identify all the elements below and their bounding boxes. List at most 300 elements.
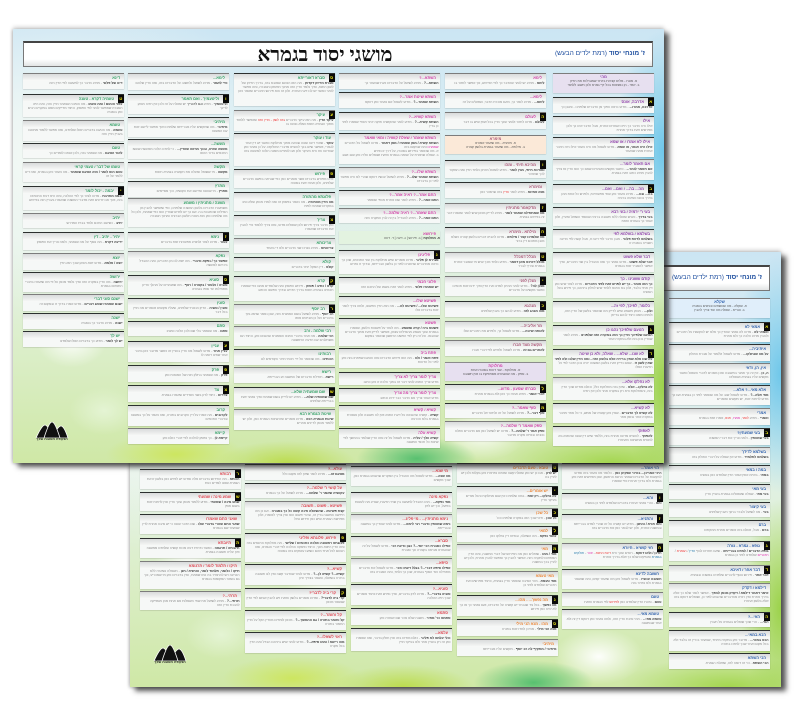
card:: לימא - מדוע יש לומר שהדבר כך לפי הפירוש, אך אפשר לחזור בו xyxy=(454,81,544,85)
card: yesh: ט xyxy=(553,465,556,470)
card: shma: שמע מינה / שמעתי - מדוע ללמוד מכאן שכך הדין ואין לדחות זאת בשום אופן xyxy=(147,500,240,508)
card: lefi: מאי xyxy=(541,546,548,551)
card: xyxy=(553,274,654,298)
card: stam: סתמא xyxy=(437,610,448,615)
column: front sheet red 3 xyxy=(140,469,242,611)
card: mina: מיתיבי xyxy=(543,641,554,646)
card: bet: ב xyxy=(765,430,768,435)
card:: ח xyxy=(541,229,544,234)
card: xyxy=(128,321,229,336)
card:: עוקר - שזוהי דעה שונה שבאה מתוך מחלוקת כאשר יש דין אחר לגמרי, ואפשר שיש בכך להוציא מדברי החולקים. על כן נאמר כאן שהדעה הזו היא העיקר ולכן אנו לומדים ממנה הלכה למעשה בזה xyxy=(244,141,334,153)
card:: נימא xyxy=(211,234,219,239)
card:: סתם xyxy=(217,323,225,328)
card:: אילו xyxy=(643,118,650,123)
card: xyxy=(553,137,654,157)
card: xyxy=(128,181,229,197)
card: xyxy=(553,349,654,374)
card:: לא שנו... שלא... - שאלה, ולא כן שיטה xyxy=(579,351,644,356)
card: hi: היכי אמרינן... בהיכי עסקינן כאן - כלומר מה נאמר בזה ומדוע להקשות על הדברים שאמר התנא הראשון, שכן מפרשים זאת כאן בגמרא ולא בדרך אחרת כפי שאמרו xyxy=(572,471,662,483)
card:: מהיכא תיתי - ומהו xyxy=(504,162,536,167)
card: xyxy=(234,367,335,383)
card: ein xyxy=(669,363,770,383)
card: lo: כ xyxy=(554,510,556,515)
card: sevara xyxy=(351,536,452,556)
box: peach note: א. מימרא - מה שאמר אמורא xyxy=(475,141,516,145)
card: gimel xyxy=(669,541,770,561)
card:: לעולם xyxy=(525,114,536,119)
box: purple note xyxy=(445,362,546,381)
card:: מנלן לפני xyxy=(520,278,536,283)
card:: בשלמא לדעת פלוני - מובן הדבר לפי דעה זו, אבל קשה לפי הדעה השנייה בסוגיה זו xyxy=(560,237,652,245)
card: stam xyxy=(351,608,452,625)
card: nafka xyxy=(351,492,452,512)
column: front sheet red 1 xyxy=(350,466,452,652)
card:: פשיטא שלו... / פשיטא לה... - מה הוא הדין הפשוט, ולמה צריך לומר זאת בדברים אלו xyxy=(342,304,438,312)
card: xyxy=(339,250,440,274)
card: mai xyxy=(457,571,558,592)
card: ein: אין, הן, ודאי xyxy=(746,365,766,370)
card:: פשיטא שלו... xyxy=(413,298,436,303)
card: lo: כל שכן - ודאי שכך הוא במקרה שלפנינו וכו' xyxy=(496,516,556,520)
card: kasha: קרי ביה לדברי? xyxy=(309,590,336,595)
card:: לאחרים גם זה - מדוע לשאול ולפרש לפי דברי חברו xyxy=(472,348,544,352)
card: bameh xyxy=(669,465,770,482)
card:: התם אמר...? ראיה אמר...? xyxy=(389,192,436,197)
card:: לאור הטעם - מה שנאמר בזה, ולכן אנחנו לומדים כך xyxy=(49,151,122,155)
card: amar: אמאי לא xyxy=(745,324,760,329)
card: beram: ברם xyxy=(759,522,766,527)
card: ki: לא נחלקו... רק זאת - במה שלמדנו אין שום מחלוקת והכל מודים בעיקר הדין xyxy=(466,494,556,502)
card: xyxy=(445,301,546,317)
card:: צד xyxy=(214,387,219,392)
card:: ידיעה דקרא - מה נוסף על מה שנאמר, ולמה צריך את הפסוק xyxy=(37,240,122,244)
card:: הטעם שלפיכך נהגו כן xyxy=(606,327,644,332)
card: xyxy=(23,73,124,89)
card: hachi: הכי השתא xyxy=(748,655,766,660)
card:: סוגיא / כלומר / בקצרה / רצף - מה שאומרים על מהלך הדיון מתחילתו עד סופו בגמרא xyxy=(142,283,228,291)
card:: מדוע אומר צריך אם הדבר כבר ידוע וכתוב xyxy=(380,396,438,400)
title bar: front sheet xyxy=(140,265,770,291)
card:: מר אליביה... xyxy=(520,323,542,328)
column: front sheet orange xyxy=(456,463,558,657)
card:: לא שנו אלא שאין ברירה אלא בלשון הזה - ומה הדין שלנו ולא לפני שאין לשון זו - שאם נדייק זאת בלשון המשנה יהיה נכון הדבר לפי כל הדעות האלו xyxy=(555,357,652,369)
card: dalet xyxy=(669,565,770,581)
card:: לימא... xyxy=(213,75,225,80)
card:: עניין אחר - מדוע לשאול מה הדין בעניין זה כאשר מדובר כאן בדבר אחר שאינו דומה לו xyxy=(135,349,228,357)
card:: יש לך לומר - מדוע כך בדברים האלו שלמדנו xyxy=(60,339,122,343)
card:: א xyxy=(649,99,652,104)
card:: ב xyxy=(649,186,652,191)
card: bar: בעי מאי - שאלה ששואלים בגמרא בעניין הדין xyxy=(705,492,768,496)
card:: פליגינן xyxy=(418,252,430,257)
card: amar rav xyxy=(245,464,346,480)
card: resha: ראוי לשאלו...? xyxy=(317,634,342,639)
card:: ה xyxy=(541,114,544,119)
card:: סוגין / סוגיה - הדיון הנוכחי שלפנינו, שעליו מקשים ואומרים מה הדין בכל דבר xyxy=(133,306,228,314)
card:: צריכותא - מדוע נצרכו שני הדברים ולא די באחד xyxy=(266,246,334,250)
card:: פ xyxy=(330,171,333,176)
card: xyxy=(339,296,440,315)
definition box: gemara: א. מונח - מלים קצרות ביותר שמובילות את הדיון xyxy=(570,79,637,83)
card: tana: טעם xyxy=(651,594,659,599)
card: taama: טעמא מאי... xyxy=(637,611,659,616)
card: xyxy=(445,340,546,356)
card: xyxy=(128,341,229,362)
card: zil xyxy=(562,543,663,566)
card: shma: שמע מינה / שמעתי xyxy=(198,494,231,499)
card: nafka: מאי נפקא... - מהו ההבדל למעשה בין שתי הדעות, שנדע מה לעשות בפועל, וכך יש לדון xyxy=(355,500,450,508)
definition box: shakla: שקלא xyxy=(714,299,725,304)
subtitle: ז' מונחי יסוד (רמת ילדים הבעש) xyxy=(555,50,645,57)
card: sevara: סברא... xyxy=(435,538,448,543)
card: xyxy=(445,421,546,441)
card: pesha: קצת פשיטא - שהשאלה אינה קשה כל כך בסברה - אם כן מה חידשה המשנה בדין זה, שהרי פשוט הוא ואין צריך לאומרו, ולכן מפרשת הגמרא שיש כאן חידוש גדול xyxy=(255,509,344,521)
card: al xyxy=(245,483,346,498)
card: xyxy=(234,133,335,166)
card: xyxy=(339,208,440,223)
card:: יש שאמרו פלוני - מדוע לומר זאת בשמו של החכם הזה xyxy=(361,285,438,289)
card:: טעם הוא לומר / הוא הטעם שנאמר - מה נאמר כאן בגמרא, ומה דינו ללמד על זה xyxy=(25,170,122,178)
panel: back sheet xyxy=(13,29,664,463)
card:: סברא דאורייתא xyxy=(298,75,325,80)
card:: קשיא עלה xyxy=(418,430,436,435)
card: xyxy=(23,213,124,228)
card:: ר xyxy=(330,306,333,311)
card: xyxy=(234,257,335,271)
card:: צריכותא xyxy=(317,240,331,245)
card: xyxy=(445,112,546,129)
card:: השתא שיטת אמר...? xyxy=(400,94,436,99)
card:: מכלל דמכלל xyxy=(514,254,536,259)
card: lema: למאי xyxy=(539,528,548,533)
card: vehatanya: והא תניא / והתנן - מדוע יש קושיה על זה שהרי למדנו בברייתא ובמשנה אחרת, ולכן יש לבאר כאן את הדברים בזה xyxy=(574,522,662,530)
card: teku: תרתי...? xyxy=(222,593,237,598)
card: taku xyxy=(140,561,241,589)
card:: התם אמר...? - מדוע לומר שם אחרת מכפי שנאמר xyxy=(367,198,438,202)
card:: ישנם סוגי דברי xyxy=(94,296,120,301)
card: betzar: בעי קיצור xyxy=(749,504,766,509)
card: ha xyxy=(562,493,663,509)
card: bar: בעי מאי xyxy=(752,486,766,491)
card:: כדי לאמר - מדוע לשאול ולחשוב על הדברים בזה, ומה הדין שלהם xyxy=(136,81,228,85)
card: xyxy=(339,277,440,293)
card:: לאפוקי xyxy=(638,428,650,433)
card:: ט xyxy=(119,96,122,101)
column: he green xyxy=(128,73,230,445)
card: zil: ח xyxy=(658,545,661,550)
card:: מהו מנהג לזה - מדוע לנהוג כך בענין שלפנינו xyxy=(481,309,544,313)
card: xyxy=(128,232,229,248)
card: xyxy=(339,388,440,402)
card: hacha xyxy=(669,630,770,651)
box: peach note: מימרא xyxy=(490,136,501,141)
card: yesh: יש לדון - אם כן יש כאן שאלה קשה שאינה נפתרת כאן בקלות ולכן יש לעיין בה xyxy=(461,471,556,479)
definition box: shakla xyxy=(669,298,770,318)
card: mah: מה נפשך - בכל צד שנבחר יש קושיה על הדברים, ואם נאמר כך או כך לא יהיה כאן פירוש xyxy=(460,603,556,611)
card:: לא נחלקו אלא... xyxy=(622,379,650,384)
card:: עיקר xyxy=(317,112,325,117)
card:: פלוני חכמי xyxy=(417,279,436,284)
card:: ירושה xyxy=(110,274,120,279)
definition box: shakla: ב. וטריא - שאלה מה עוד צריך להבין xyxy=(694,308,745,312)
card: lema xyxy=(457,526,558,542)
card:: קיימא לן - כך נפסק להלכה לפי דברי כולם כאן xyxy=(163,436,228,440)
logo: back sheet: הנקודה הטובה שלך xyxy=(36,437,68,441)
card: alma: עלמא... xyxy=(435,630,448,635)
logo: front sheet xyxy=(154,645,186,664)
card: vehatanya: והתניא... xyxy=(638,516,653,521)
card: shani xyxy=(140,514,241,534)
card: xyxy=(128,385,229,402)
card:: השתא...? - מדוע לשאול על הדברים כעת שנאמר כך xyxy=(365,81,438,85)
card:: מנא אמינא - מדוע לומר הדין בזה שהוזכר כאן xyxy=(480,190,544,194)
logo: front sheet: הנקודה הטובה שלך xyxy=(154,660,186,664)
card: ki: י xyxy=(554,488,555,493)
column: bet magenta xyxy=(444,73,546,442)
card:: ב. שאלה שחוזרת על עצמה בגמרא הזאת ושואלים עליה כאן שוב ושוב xyxy=(342,153,438,157)
card: sugya xyxy=(351,584,452,605)
card: mahu: ס xyxy=(553,621,556,626)
card:: קרא / כתיב / פסוק - פירוש הפסוק ומה שלומדים ממנו כפי שאמרו חכמינו בגמרא הזאת בדרך הדרש ובדרך הפשט הכתוב xyxy=(241,284,334,292)
card: xyxy=(445,403,546,418)
card:: לימא xyxy=(533,75,542,80)
card:: ספק שאמר ר' שלמה...? xyxy=(501,423,542,428)
card: ha: והא - והרי נאמר אחרת בדברים שלמדנו לפני כן בסוגיה xyxy=(585,501,662,505)
card:: קולא xyxy=(322,259,331,264)
card: rabbi: ר xyxy=(236,471,239,476)
card: amar rav: מטעם זה... - מדוע לומר שאין לזה מקום כלל xyxy=(282,472,344,476)
card:: סברת הדיוק דקדוק - מה הוא הטעם שמובא בזה, בדרך הדיוק של לשון התנא, ואיך נלמד הדין הזה מתוך הפסוק והסברה, ומה אפשר לומר כאשר יש לנו דעה אחרת. ולכן זה הוא פירוש הדברים שאמר כאן xyxy=(238,81,334,93)
card: ika: איתיביה... xyxy=(749,346,766,351)
card: amri: אמרי xyxy=(757,410,766,415)
card: sugya: סוגיא...? xyxy=(433,586,448,591)
card:: עיקר הדין - מה הוא עיקר הדברים בזה לשון - הדין הזה שאפשר ללמוד מתוך הגמרא הזאת ושלא נטעה בו xyxy=(236,118,334,126)
card: xyxy=(234,215,335,235)
card: mai: מאי טעמא - מהי הסיבה שנאמר הדין בגמרא, וכיצד מפרשים את הדברים שלמדנו לפני כן xyxy=(466,579,556,587)
card: bet: בעי שמעתין? xyxy=(737,430,760,435)
card:: מקשה xyxy=(214,164,225,169)
card: zil: חזינן / ולאו דווקא - רואים שכך היא דעת התנא - זכור - חולקים בגמרא ומסיקים שלא כך אלא בדרך אחרת xyxy=(574,551,662,559)
card: xyxy=(128,73,229,90)
card:: בשלמא / בשלמא לפי xyxy=(613,231,650,236)
card: betzar xyxy=(669,502,770,517)
logo: back sheet xyxy=(36,422,68,441)
card:: יתיר - יתיב - דין xyxy=(94,234,120,239)
card: xyxy=(445,227,546,247)
card: bet xyxy=(669,428,770,445)
card: xyxy=(339,133,440,164)
card:: ומימרא xyxy=(529,184,542,189)
card:: דבר שלא פשוט xyxy=(623,254,650,259)
card:: שם שמעתיה שלא... - מדוע יש לדייק בשם שאמרו ואיך נאמר זאת בברייתא שלפנינו xyxy=(241,395,334,403)
card: ela: מאי אלא...? - מדוע לשאול שוב על מה שנאמר לפני כן בגמרא אם כך מדוע לדחות זאת, יש מקשים ואומרים xyxy=(672,393,768,401)
card: mina xyxy=(457,639,558,656)
card: perak: קשיא...? xyxy=(327,566,342,571)
card: xyxy=(23,253,124,270)
card:: קודם ששנינו - כך xyxy=(620,276,650,281)
title bar xyxy=(23,41,653,67)
card:: ע xyxy=(224,343,227,348)
card: perush: פירוש, פלוגתא ופליגי xyxy=(299,535,336,540)
card:: מיתיבי - מה שמקשים עליו מברייתא שלמדנו ואיך אפשר ליישב זאת עם המשנה xyxy=(134,125,228,133)
card:: מעשה שהיה, ובכך מראה שהדין... - כי למדנו הלכה ממעשה שעשו החכמים בדור ההוא xyxy=(133,147,228,155)
card: xyxy=(234,349,335,365)
card: xyxy=(128,117,229,137)
card:: יוצא / אלמא - מדוע יוצא מכאן שכך הוא הדין xyxy=(60,261,122,265)
card: rabbi: רבותא - מה החידוש בדברים אלה ומדוע יש לפרש כאן בלשון זו את הגמרא שאנו למדים כעת xyxy=(147,477,240,485)
card:: פרט מפורש בדברים אשר אומרים כאן כפי שנראה בפשט הדברים שלפנינו, ולכן אמרו זאת בסוגיה xyxy=(243,177,334,185)
card: teku: תרתי...? - מדוע לשאול את שתי השאלות אם אחת מהן מספיקה להבנת הדין הזה xyxy=(150,599,240,607)
card:: פשטא xyxy=(425,320,436,325)
card: xyxy=(553,184,654,203)
card: bameh: במאי - באיזה אופן אמור הדין שלמדנו כאן בסוגיה xyxy=(700,473,768,477)
card:: סוגיא xyxy=(209,277,219,282)
card: xyxy=(445,92,546,108)
card: rabbi xyxy=(140,469,241,489)
card:: ז xyxy=(542,205,544,210)
card: bishlama: בשלמא לתלמיד - מדוע אין שאלה על דברי החולק בזה xyxy=(692,455,768,459)
card: rabbi: רבותא xyxy=(220,471,231,476)
card:: השתא קשיא...? xyxy=(409,114,436,119)
card:: צדדים - כיצד לדון בשני הצדדים שאמרו בגמרא xyxy=(162,393,228,397)
panel: front sheet xyxy=(130,252,781,687)
card: xyxy=(23,331,124,347)
card: xyxy=(339,112,440,130)
card:: ס xyxy=(330,75,333,80)
card: perush xyxy=(245,533,346,562)
card: mahu: מנא הני מילי - מהיכן למדו זאת בתורה xyxy=(502,627,556,631)
card: kasha: קרי ביה לדברי? - ומדוע אומרים בלשון הזאת ויש להבין אותם לפי הדין שנשאר מכאן xyxy=(246,596,344,604)
card: kol: קל וחומר...? xyxy=(320,612,342,617)
card:: לא נחלקו... אלא - שאין בזה מחלוקת כלל, וכולם מודים שכך הדין בזה, והמחלוקת היא רק במקרה אחר ולכן אין ראיה xyxy=(561,385,652,393)
card:: סוף שאמר...? xyxy=(512,405,536,410)
card: xyxy=(128,139,229,159)
card:: ש xyxy=(330,389,334,394)
card:: ישנה - מדוע הדבר כך בסוגיה xyxy=(81,321,122,325)
card: nimtza xyxy=(351,514,452,533)
card: al: עקושיה שאמר ר' שלמה... - מדוע לשאול על כך בגמרא xyxy=(266,491,344,495)
card: xyxy=(23,186,124,210)
card: xyxy=(339,372,440,385)
card:: כאן הדבר צריך פירוש ולכן שואלים מדוע, ומה צריך ללמוד כדי להבין את הדברים שנאמרו xyxy=(240,223,334,231)
card: hachi xyxy=(669,653,770,669)
card:: אם תאמר לומר... - כאשר מקשים ואומרים שאם כך הוא הדין אז צריך להבין מדוע כתוב זאת בגמרא xyxy=(556,167,652,175)
card:: אם תאמר לומר... xyxy=(620,161,650,166)
card:: פרק xyxy=(212,367,219,372)
card: ela: אלא מאי...? אלא... xyxy=(733,387,766,392)
card: xyxy=(23,162,124,182)
card:: צריך xyxy=(317,217,325,222)
card: hacha: הכא במאי... - מדובר כאן במקרה מיוחד, שנאמר בו דין זה בלבד ולא בכל מקום אחר שכך למדנו בתורה xyxy=(674,638,768,646)
card:: בעי ר' ירמיה / בעי רבא xyxy=(611,209,650,214)
card: xyxy=(339,405,440,426)
card: taama: טעמא מאי... - מהי סיבת הדין הזה, ולמה נאמר כאן דווקא דין זה ולא אחר שבמשנה xyxy=(567,617,662,625)
card: dilma: דילמא / דקדק xyxy=(742,585,766,590)
card:: לימא... - מדוע לומר כך, האם מוכרח הדבר, ושואלים על זה xyxy=(463,100,544,104)
card: xyxy=(23,94,124,117)
card:: לימא... xyxy=(530,94,542,99)
card: hasheb: חשובה לדינא xyxy=(636,571,659,576)
card:: ד xyxy=(649,351,652,356)
card: xyxy=(128,298,229,318)
card:: דינו של פלוני - מדוע הדבר כך למעשה לפי הדין הזה xyxy=(49,81,122,85)
card: mah: מה נפשך... - מהו... xyxy=(515,597,548,602)
card: xyxy=(445,160,546,178)
card:: צ xyxy=(330,217,333,222)
card:: א. מה שנאמר בפירוש בסוגיה, על דרך זו נפרש xyxy=(374,149,438,153)
card:: קשיא עלך / עליה - מדוע לשאול על זה ומה הדין שנלמד בהמשך לפי שיטת כל חכמי המשנה xyxy=(343,436,438,444)
card: xyxy=(234,192,335,211)
card:: ירושה - מה הדין במקרה הזה ואיך נלמד מכאן על פי מה שאמרו בדברי התנאים בגמרא xyxy=(25,280,122,288)
card:: בעי בדרך - כשיש שאלה ללא תשובה ברורה שעומד השואל ומעיין, ולכן אומר כך בגמרא הזאת xyxy=(555,215,652,223)
card:: השתא שאמר...? - מדוע לשאול אם נאמר כאן דווקא xyxy=(365,100,438,104)
card:: השתא שאמר שלו...? - מדוע לשאול עכשיו דווקא שהרי לא היה אפשר לפני כן בדברים xyxy=(341,175,438,183)
box: peach note xyxy=(445,135,546,154)
card: mai: מאי טעמא xyxy=(536,573,554,578)
card: xyxy=(339,428,440,448)
card: xyxy=(128,405,229,426)
card: ki xyxy=(457,486,558,505)
card:: דבר שלא פשוט - מדוע נאמר כך ומה ההבדל בין שני הדברים, ואיך אפשר להסביר זאת בגמרא xyxy=(559,260,652,268)
card:: רבי שלמה - מה אמר בדברי התנא והאמורא שהובאו כאן, וכיצד הם משתלבים עם הדעה הראשונה xyxy=(240,334,334,342)
card: amri: ואמרי - מדוע לומר, אמרו, תנא, אמרו זאת בגמרא xyxy=(699,416,768,420)
card: xyxy=(553,325,654,345)
card:: מה הדין מהתורה - מה נאמר בפסוק זה ומה למדו מכאן שלא כמו במקרים שאמרו לפניו xyxy=(242,200,334,208)
card: zil: חזי קושיא - חיורא xyxy=(622,545,653,550)
card: shelo: ת xyxy=(236,540,239,545)
card: amri xyxy=(669,408,770,425)
card:: ו xyxy=(542,162,543,167)
card: perak: קשיא...? קשיא לן...? - מדוע לומר שהדבר קשה ואין לנו תשובה ברורה בשאלה, ונשאר בצריך עיון xyxy=(255,572,344,580)
main title: מושגי יסוד בגמרא xyxy=(257,44,393,66)
card: lema: למאי נפקא - מה השאלה, ובאיזה דין נחלקו כאן xyxy=(490,534,556,538)
card: mah xyxy=(457,595,558,616)
card: dalet: דבר אחר - פירוש נוסף לדברים שלפנינו במשנה ובגמרא xyxy=(690,573,768,577)
card: taku: תיקו / תלמוד לומר / תרגומא xyxy=(189,563,237,568)
box: green definition: א. מחלוקת | ב. פירוש | ג. דעה | ד. דעה xyxy=(384,236,440,240)
card:: מקשה מצד חברו xyxy=(513,342,542,347)
card:: התם שאמר...? ראיה שלמה...? xyxy=(383,210,436,215)
card: hi: הוי אומר... xyxy=(641,465,659,470)
card:: מתרץ - מי שעונה ומיישב את הקושיה, וכך מסיימים xyxy=(157,189,228,193)
card:: רבי שלמה - ורב xyxy=(304,328,331,333)
card: nami: מה שנא... - מדוע לשאול מה ההבדל בין המקרים שהובאו בגמרא כאן, שכך מקשים xyxy=(353,474,450,482)
card:: פתח ביה xyxy=(421,350,436,355)
card: mah: נ xyxy=(554,597,556,602)
card: dilma: אימר דאמר דילמא / דקדק מכאן להפך - אפשר לומר שלא כך אלא בדרך אחרת ואין ראיה מהדברים שהובאו לפני כן, ושואלים דווקא בזה אלא בלשון אחרת xyxy=(673,591,768,603)
card:: פלוגתא מהתורה xyxy=(302,194,331,199)
card:: התם אמר...? - מדוע להבדיל בין זה לבין המקרה הזה xyxy=(364,216,438,220)
card: xyxy=(234,238,335,253)
card:: יבמה מחויבת - מדוע לומר כך לפי ההלכה, ומה היא דעת החכמים בזה, ואיך אנו יודעים זאת מדברי המשנה שנאמרו בעניין הזה בפירוש xyxy=(29,194,122,202)
card:: כך הוא אומר - כך יש לפרש זאת לפני הדברים - מדוע לומר שיש כאן דין אחד בלבד, ולכן בא התנא ללמד שיש לחלק ביניהם, כך פירש בעל הסוגיה xyxy=(555,282,652,294)
card: lo xyxy=(457,508,558,523)
card: mina: מיתיבי / מתקיף לה רב יוסף - מקשים עליו מברייתא xyxy=(483,647,556,651)
card: amar xyxy=(669,322,770,342)
card:: ולכן... - מכאן משמע שיש לדייק מה שנאמר בלשון של הדין הזה, ולמדנו ממנו כיצד לנהוג בדיוק xyxy=(564,309,652,317)
card:: פתח ואמר / ולה - מה הוא פירוש הדברים ומה הטעם שפתחו בזה כאן לפני כל הדעות xyxy=(342,356,438,364)
card: xyxy=(234,73,335,106)
card: dilma xyxy=(669,583,770,607)
card:: בה... ובה... - מדוע נאמר כאן שתי אפשרויות, ולפרש כל אחת מהן בדרך נכונה ושיטה ברורה xyxy=(561,192,652,200)
card:: דברי אומר - מדוע אמרו כך כאן ולא בגמרא אחרת xyxy=(475,392,544,396)
card:: השתא שלו...? xyxy=(412,169,436,174)
card:: צ xyxy=(224,387,227,392)
card:: עוד / עוקר xyxy=(314,135,331,140)
card: ki: יש אומרים... xyxy=(527,488,548,493)
definition box: gemara: מהי xyxy=(600,74,607,79)
card:: ע xyxy=(330,112,333,117)
